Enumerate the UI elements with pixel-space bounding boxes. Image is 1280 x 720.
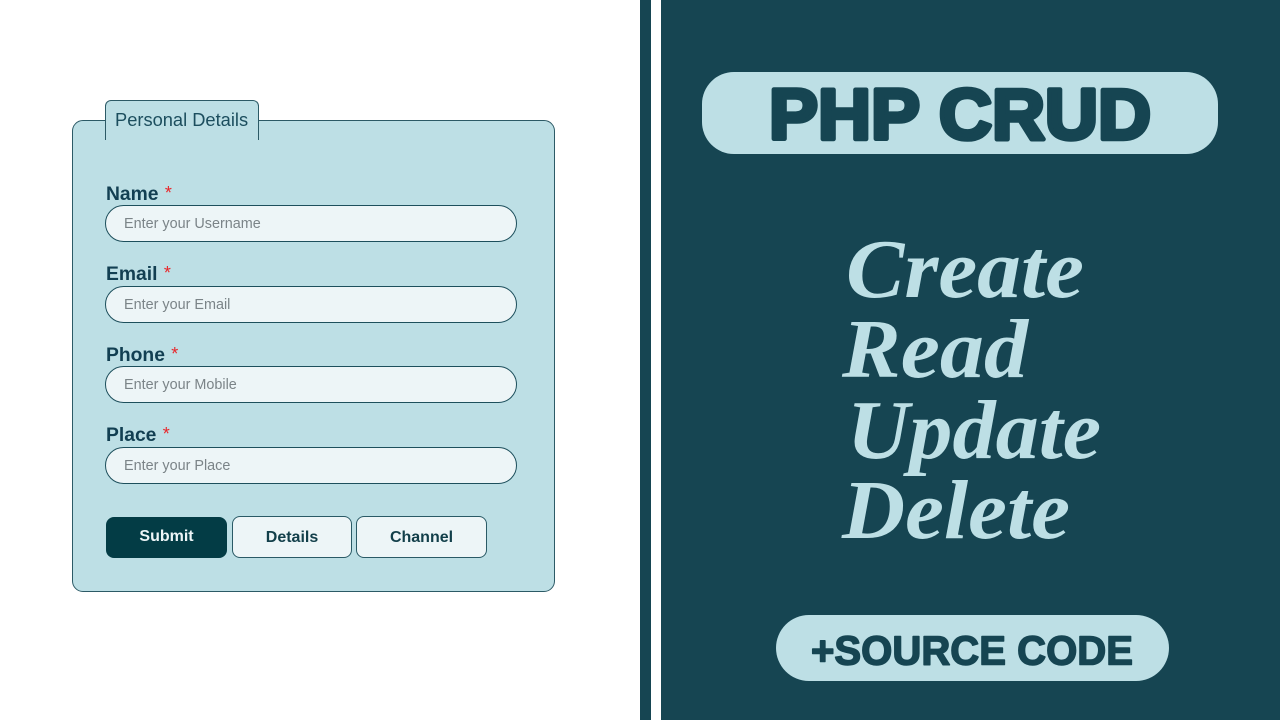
button: Submit bbox=[106, 517, 227, 558]
title badge: PHP CRUD bbox=[702, 72, 1218, 155]
label: Place: Place * bbox=[106, 424, 170, 446]
input: Username: Enter your Username bbox=[124, 216, 261, 232]
label: Email: Email * bbox=[106, 263, 171, 285]
button: Channel bbox=[356, 516, 487, 558]
text: Create Read Update Delete: Update bbox=[847, 384, 1101, 477]
text: Create Read Update Delete: Read bbox=[841, 303, 1030, 396]
input: Mobile: Enter your Mobile bbox=[124, 377, 237, 393]
input: Email: Enter your Email bbox=[124, 297, 230, 313]
badge: +SOURCE CODE: +SOURCE CODE bbox=[811, 628, 1133, 674]
input: Place bbox=[105, 447, 517, 484]
badge: +SOURCE CODE bbox=[776, 615, 1169, 681]
label: Name: Name * bbox=[106, 183, 172, 205]
panel: form card bbox=[72, 120, 555, 592]
button: Channel: Channel bbox=[390, 529, 453, 546]
text: Create Read Update Delete: Create bbox=[846, 223, 1084, 316]
label: Phone: Phone * bbox=[106, 344, 178, 366]
tab: Personal Details: Personal Details bbox=[115, 109, 248, 130]
button: Submit: Submit bbox=[139, 528, 194, 545]
tab: Personal Details bbox=[105, 100, 259, 140]
button: Details: Details bbox=[266, 529, 318, 546]
title badge: PHP CRUD: PHP CRUD bbox=[769, 76, 1151, 155]
panel: dark background with divider stripe bbox=[640, 0, 1280, 720]
input: Place: Enter your Place bbox=[124, 458, 230, 474]
text: Create Read Update Delete: Delete bbox=[841, 464, 1070, 557]
input: Username bbox=[105, 205, 517, 242]
text: Create Read Update Delete bbox=[841, 223, 1101, 557]
input: Email bbox=[105, 286, 517, 323]
button: Details bbox=[232, 516, 352, 558]
input: Mobile bbox=[105, 366, 517, 403]
